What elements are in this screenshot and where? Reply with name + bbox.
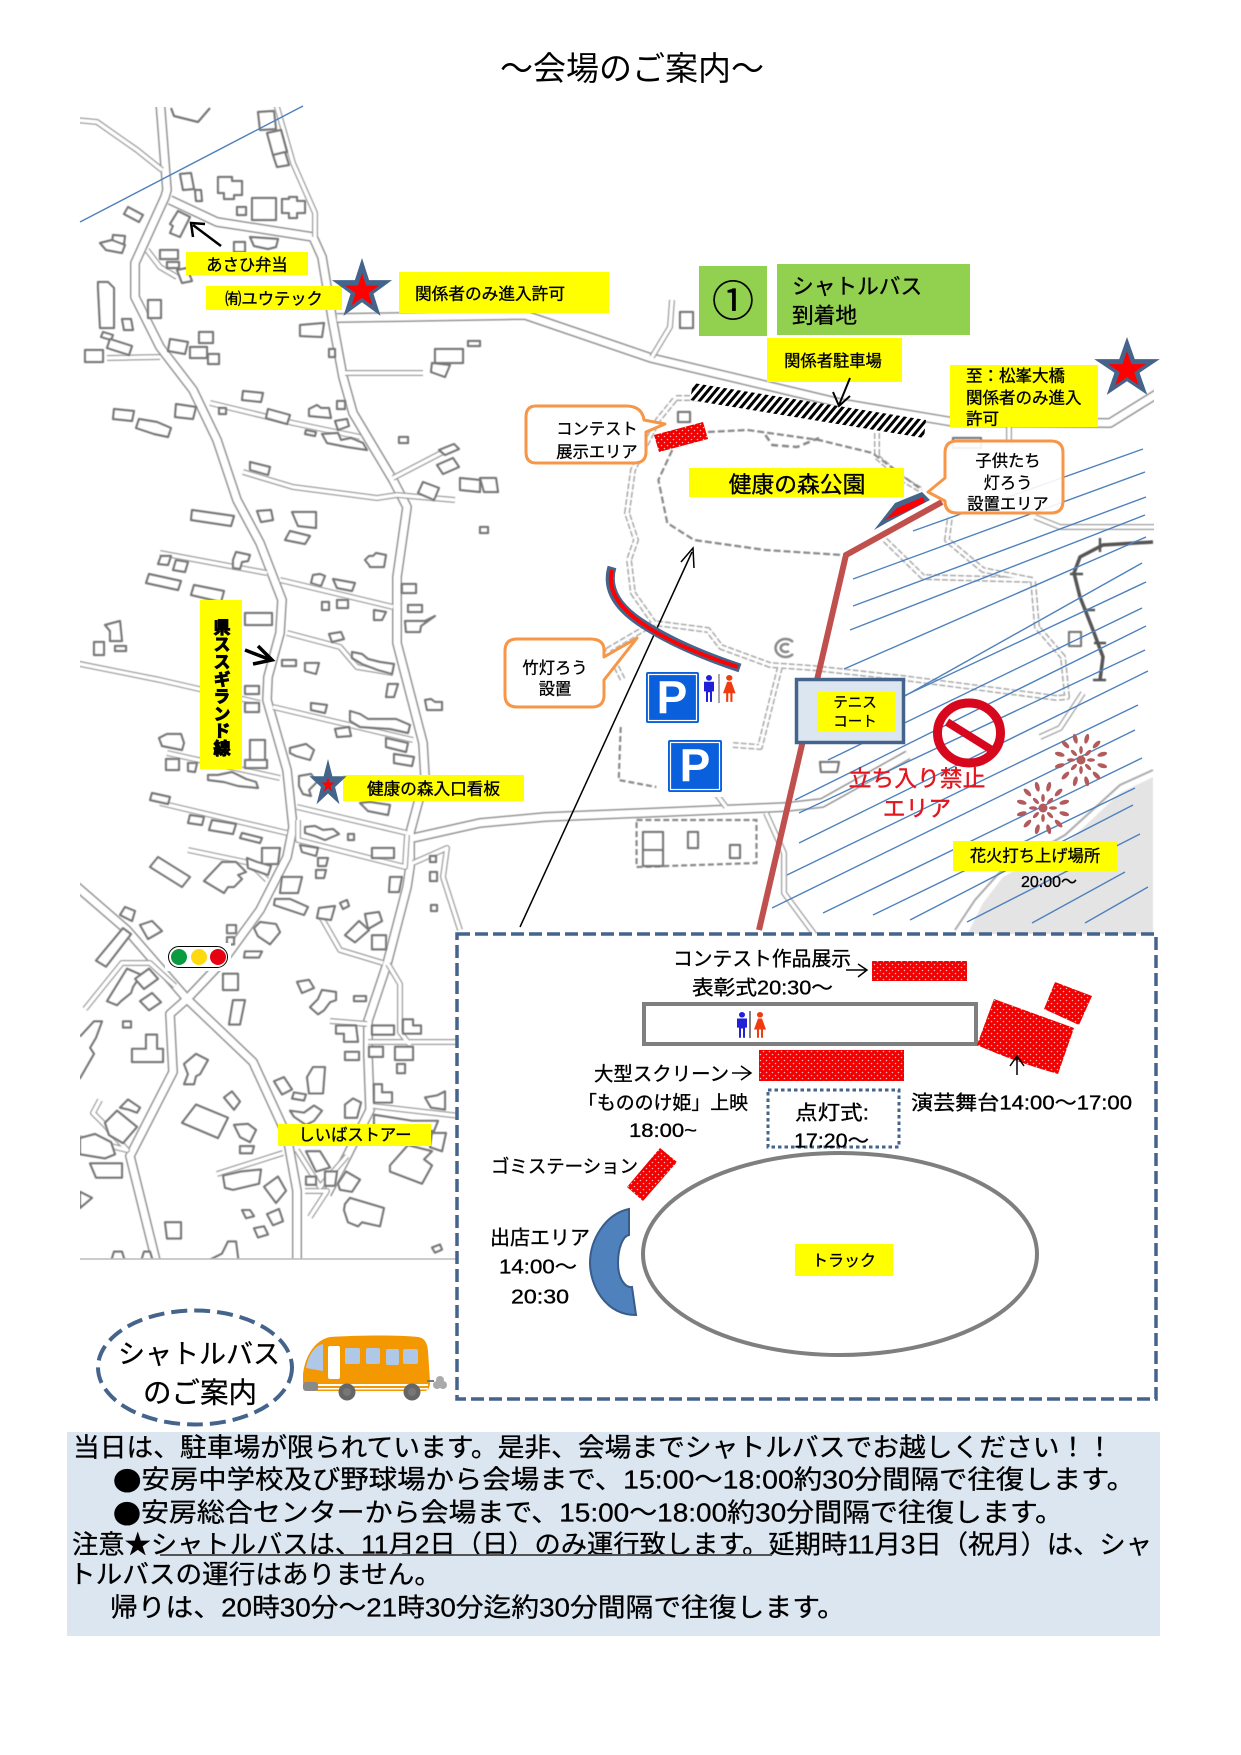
arrow: exhibit [846, 964, 867, 977]
callout: bamboo lanterns [505, 638, 637, 707]
no entry text: エリア [883, 796, 951, 822]
arrow to parking [833, 378, 850, 406]
info line 4: 注意★シャトルバスは、11月2日（日）のみ運行致します。延期時11月3日（祝月）は、シャ [72, 1530, 1152, 1560]
large screen rect [759, 1050, 904, 1081]
base road map [74, 100, 1160, 1265]
parking sign halo 1 [642, 666, 706, 728]
label: lighting ceremony: 点灯式: [795, 1102, 869, 1124]
info line 5: トルバスの運行はありません。 [69, 1560, 441, 1590]
garbage rect [627, 1148, 677, 1201]
tennis court: テニス [833, 696, 877, 712]
callout: children lanterns [928, 441, 1063, 514]
star: yutech [332, 258, 392, 316]
map bottom rule [80, 1258, 456, 1260]
shuttle arrival label [777, 264, 970, 335]
star: matsumine [1094, 337, 1160, 395]
firework icon 1 [1054, 733, 1108, 787]
map buildings [85, 108, 1081, 939]
info line 2: ●安房中学校及び野球場から会場まで、15:00～18:00約30分間隔で往復します。 [113, 1461, 1135, 1498]
arrow to road [245, 646, 272, 664]
lower map buildings [74, 921, 446, 1265]
label: matsumine bridge: 許可 [966, 410, 999, 428]
track label: トラック [812, 1252, 876, 1270]
shuttle number badge [699, 266, 767, 336]
label: matsumine bridge: 関係者のみ進入 [966, 388, 1082, 408]
label: fireworks [953, 841, 1117, 891]
stall area shape [590, 1209, 636, 1315]
callout: children lanterns: 灯ろう [984, 474, 1032, 492]
contest area rect [654, 422, 708, 452]
no entry text [849, 766, 985, 822]
vertical road label: 県ススギランド線 [210, 618, 230, 757]
label: park entrance sign [343, 775, 524, 801]
label: large screen: 大型スクリーン [594, 1064, 729, 1086]
title: ～会場のご案内～ [500, 50, 764, 87]
parking sign 1: P [657, 672, 687, 724]
no entry sign [938, 703, 1000, 763]
callout: children lanterns: 設置エリア [967, 496, 1049, 514]
label: park name: 健康の森公園 [729, 472, 865, 498]
callout: bamboo lanterns: 竹灯ろう [522, 660, 588, 678]
callout: bamboo lanterns: 設置 [539, 680, 571, 698]
label: fireworks: 花火打ち上げ場所 [970, 848, 1100, 866]
toilet icon [704, 674, 736, 703]
tennis court: コート [833, 714, 877, 730]
parking sign 2 [668, 740, 722, 792]
label: fireworks: 20:00～ [1021, 874, 1077, 891]
label: mononoke time: 18:00~ [629, 1121, 697, 1142]
shuttle number badge: ① [712, 278, 754, 325]
shuttle bus heading [98, 1310, 292, 1424]
label: shiiba store: しいばストアー [298, 1126, 412, 1144]
label: asahi bento [186, 252, 308, 275]
hatched parking area [690, 383, 926, 438]
label: matsumine bridge [950, 365, 1098, 428]
track [643, 1153, 1037, 1355]
toilet icon [737, 1011, 766, 1038]
label: staff only [399, 272, 609, 313]
label: matsumine bridge: 至：松峯大橋 [966, 366, 1066, 386]
stage annex [1044, 982, 1092, 1025]
callout: contest area: 展示エリア [556, 444, 638, 462]
label: stall close time: 20:30 [511, 1286, 569, 1308]
parking sign 1 [646, 672, 699, 724]
vertical road label [200, 600, 242, 769]
label: park entrance sign: 健康の森入口看板 [367, 780, 501, 798]
info line 1: 当日は、駐車場が限られています。是非、会場までシャトルバスでお越しください！！ [73, 1432, 1113, 1462]
shuttle arrival label: 到着地 [792, 303, 857, 328]
label: asahi bento: あさひ弁当 [206, 256, 288, 274]
star: entrance sign [309, 759, 347, 804]
shuttle arrival label: シャトルバス [792, 274, 922, 299]
boundary line: restricted area [759, 502, 942, 930]
building rect [644, 1004, 976, 1044]
label: staff parking: 関係者駐車場 [784, 352, 882, 370]
lighting ceremony box [768, 1090, 899, 1147]
traffic light [165, 943, 231, 971]
exhibit rect [872, 961, 967, 981]
callout: children lanterns: 子供たち [975, 452, 1041, 470]
tennis court [796, 680, 904, 742]
restricted area hatching [772, 449, 1148, 923]
arrow: screen [732, 1066, 751, 1080]
bus icon [303, 1336, 447, 1400]
info underline [160, 1554, 772, 1556]
label: yutech: ㈲ユウテック [225, 290, 323, 308]
blue boundary line [80, 106, 303, 222]
label: stall open time: 14:00～ [499, 1256, 577, 1278]
label: yutech [206, 286, 342, 310]
track label [795, 1244, 893, 1276]
parking sign halo 2 [662, 735, 729, 797]
label: staff parking [767, 338, 902, 382]
label: shiiba store [278, 1124, 431, 1146]
label: lighting time: 17:20～ [794, 1130, 869, 1152]
stage [977, 999, 1074, 1074]
shuttle bus heading: シャトルバス [118, 1340, 280, 1370]
callout: contest area [526, 406, 665, 463]
shuttle bus heading: のご案内 [143, 1378, 257, 1410]
label: staff only: 関係者のみ進入許可 [415, 284, 565, 304]
label: contest exhibit: コンテスト作品展示 [673, 948, 851, 970]
children lantern area [874, 492, 930, 530]
line to detail box [520, 548, 694, 927]
firework icon 2 [1016, 781, 1070, 835]
label: award ceremony: 表彰式20:30～ [692, 976, 833, 1000]
parking sign 2: P [680, 740, 710, 792]
no entry text: 立ち入り禁止 [849, 766, 985, 792]
callout: contest area: コンテスト [556, 420, 638, 438]
label: park name [689, 468, 904, 498]
label: garbage station: ゴミステーション [491, 1156, 638, 1177]
detail box [457, 934, 1156, 1399]
shuttle information panel [67, 1432, 1160, 1636]
label: mononoke: 「もののけ姫」上映 [578, 1092, 748, 1114]
label: entertainment stage: 演芸舞台14:00～17:00 [911, 1092, 1132, 1114]
arrow to asahi bento [191, 223, 221, 246]
label: stall area: 出店エリア [490, 1226, 590, 1250]
bamboo lantern curve [610, 567, 740, 668]
info line 3: ●安房総合センターから会場まで、15:00～18:00約30分間隔で往復します。 [113, 1494, 1063, 1531]
info line 6: 帰りは、20時30分～21時30分迄約30分間隔で往復します。 [110, 1592, 845, 1622]
arrow: stage [1010, 1056, 1024, 1075]
